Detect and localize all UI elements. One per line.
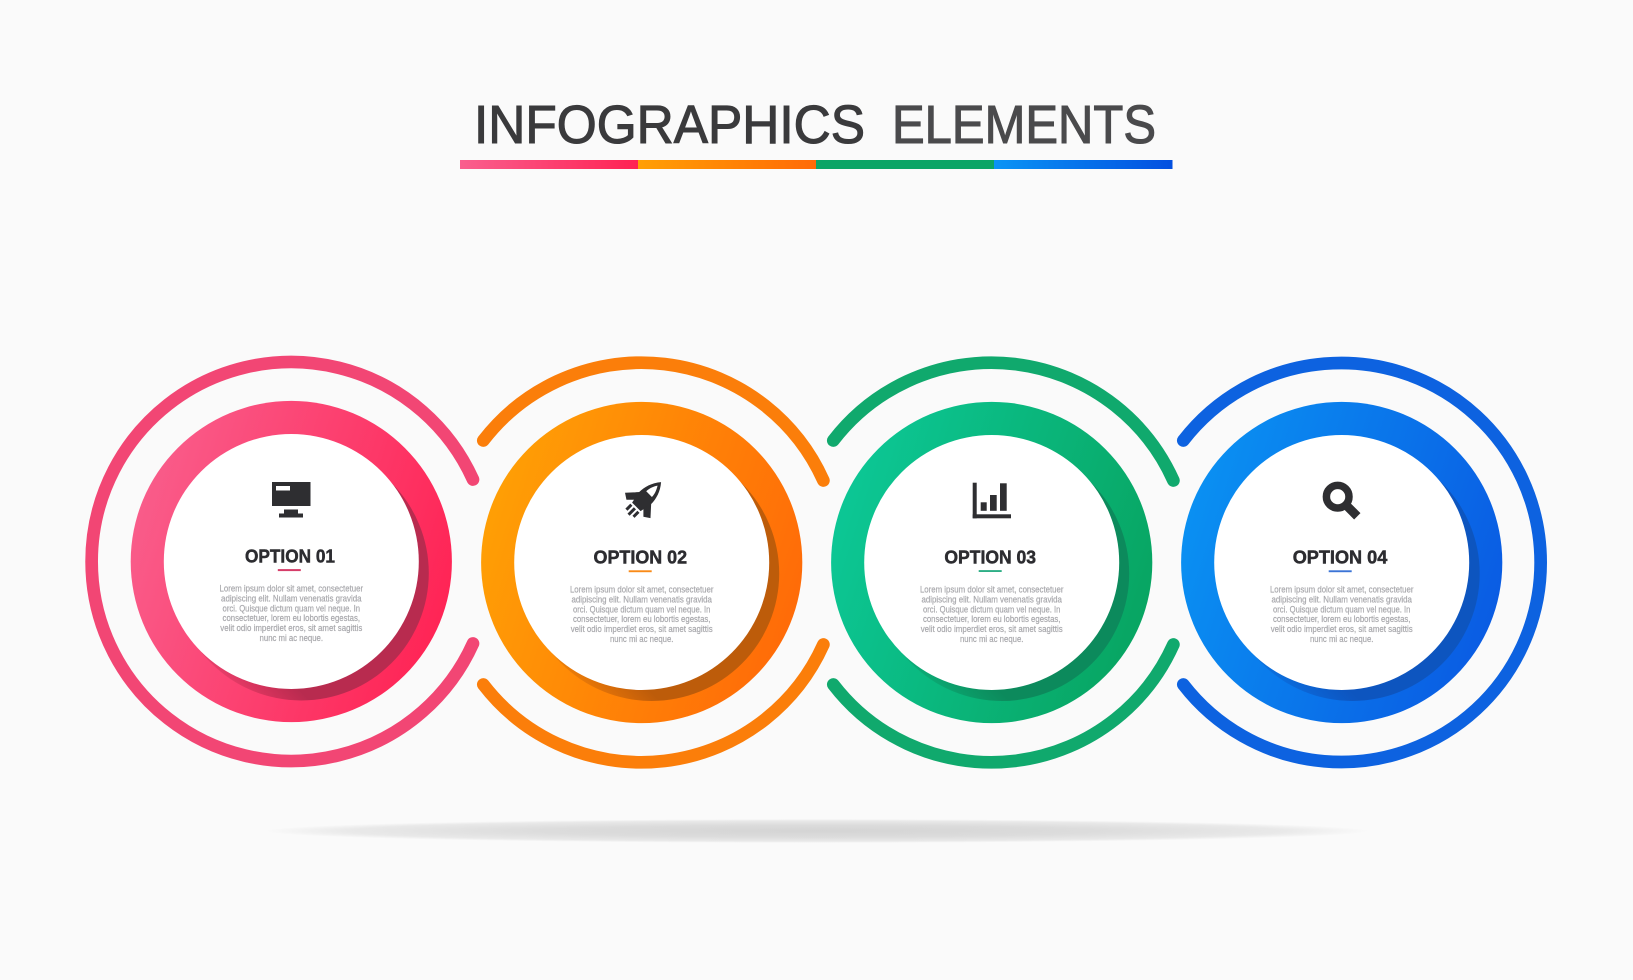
body text: consectetuer, lorem eu lobortis egestas, [1273, 614, 1410, 624]
heading underline [1329, 570, 1352, 572]
body text: adipiscing elit. Nullam venenatis gravida [921, 594, 1063, 604]
body text: consectetuer, lorem eu lobortis egestas, [923, 614, 1060, 624]
title: ELEMENTS [892, 95, 1156, 155]
heading underline [629, 570, 652, 572]
outer arc bottom [483, 644, 823, 762]
icon: magnifier [1326, 485, 1357, 516]
body text: consectetuer, lorem eu lobortis egestas, [223, 613, 360, 623]
heading: option 02: OPTION 02 [594, 546, 687, 568]
inner shadow crescent [524, 446, 779, 701]
body text: adipiscing elit. Nullam venenatis gravida [221, 593, 362, 603]
outer arc ring [1183, 363, 1541, 762]
body text: orci. Quisque dictum quam vel neque. In [923, 604, 1060, 614]
title underline: four colour bar [460, 160, 1172, 169]
body text: orci. Quisque dictum quam vel neque. In [223, 603, 360, 613]
body text [570, 584, 713, 644]
inner shadow crescent [874, 446, 1129, 701]
icon: monitor [272, 482, 310, 518]
icon: rocket [616, 469, 674, 527]
ground shadow [265, 819, 1369, 843]
gradient ring [481, 402, 802, 723]
body text [220, 584, 363, 643]
gradient ring [131, 401, 452, 722]
body text: nunc mi ac neque. [1310, 634, 1373, 644]
body text: velit odio imperdiet eros, sit amet sagittis [220, 623, 363, 633]
inner shadow crescent [1225, 446, 1480, 701]
body text: nunc mi ac neque. [610, 634, 673, 644]
title [474, 95, 1156, 155]
panel: option 04 [1181, 363, 1541, 762]
heading: option 04: OPTION 04 [1293, 546, 1388, 568]
title: INFOGRAPHICS [474, 95, 865, 155]
body text: velit odio imperdiet eros, sit amet sagittis [921, 624, 1063, 634]
white disc [514, 435, 769, 690]
heading underline [979, 570, 1002, 572]
body text: consectetuer, lorem eu lobortis egestas, [573, 614, 710, 624]
white disc [164, 434, 419, 689]
body text [1270, 584, 1413, 644]
panel: option 02 [481, 363, 823, 762]
gradient ring [1181, 402, 1502, 723]
white disc [1214, 435, 1469, 690]
body text: Lorem ipsum dolor sit amet, consectetuer [570, 584, 713, 594]
body text: nunc mi ac neque. [960, 634, 1023, 644]
body text: Lorem ipsum dolor sit amet, consectetuer [920, 584, 1063, 594]
body text: orci. Quisque dictum quam vel neque. In [573, 604, 710, 614]
heading: option 03: OPTION 03 [944, 546, 1036, 568]
outer arc ring [92, 362, 473, 761]
heading: option 01: OPTION 01 [245, 546, 335, 567]
outer arc top [833, 363, 1173, 480]
body text: orci. Quisque dictum quam vel neque. In [1273, 604, 1410, 614]
heading underline [278, 569, 301, 571]
body text: Lorem ipsum dolor sit amet, consectetuer [220, 584, 363, 594]
body text: velit odio imperdiet eros, sit amet sagittis [1271, 624, 1413, 634]
body text: adipiscing elit. Nullam venenatis gravida [571, 594, 713, 604]
body text: nunc mi ac neque. [260, 633, 323, 643]
panel: option 01 [92, 362, 473, 761]
outer arc top [483, 363, 823, 480]
gradient ring [831, 402, 1152, 723]
icon: bar chart [973, 483, 1011, 518]
body text: Lorem ipsum dolor sit amet, consectetuer [1270, 584, 1413, 594]
inner shadow crescent [174, 446, 429, 700]
panel: option 03 [831, 363, 1173, 762]
body text: adipiscing elit. Nullam venenatis gravida [1271, 594, 1413, 604]
body text: velit odio imperdiet eros, sit amet sagittis [571, 624, 713, 634]
body text [920, 584, 1063, 644]
white disc [864, 435, 1119, 690]
outer arc bottom [833, 644, 1173, 762]
